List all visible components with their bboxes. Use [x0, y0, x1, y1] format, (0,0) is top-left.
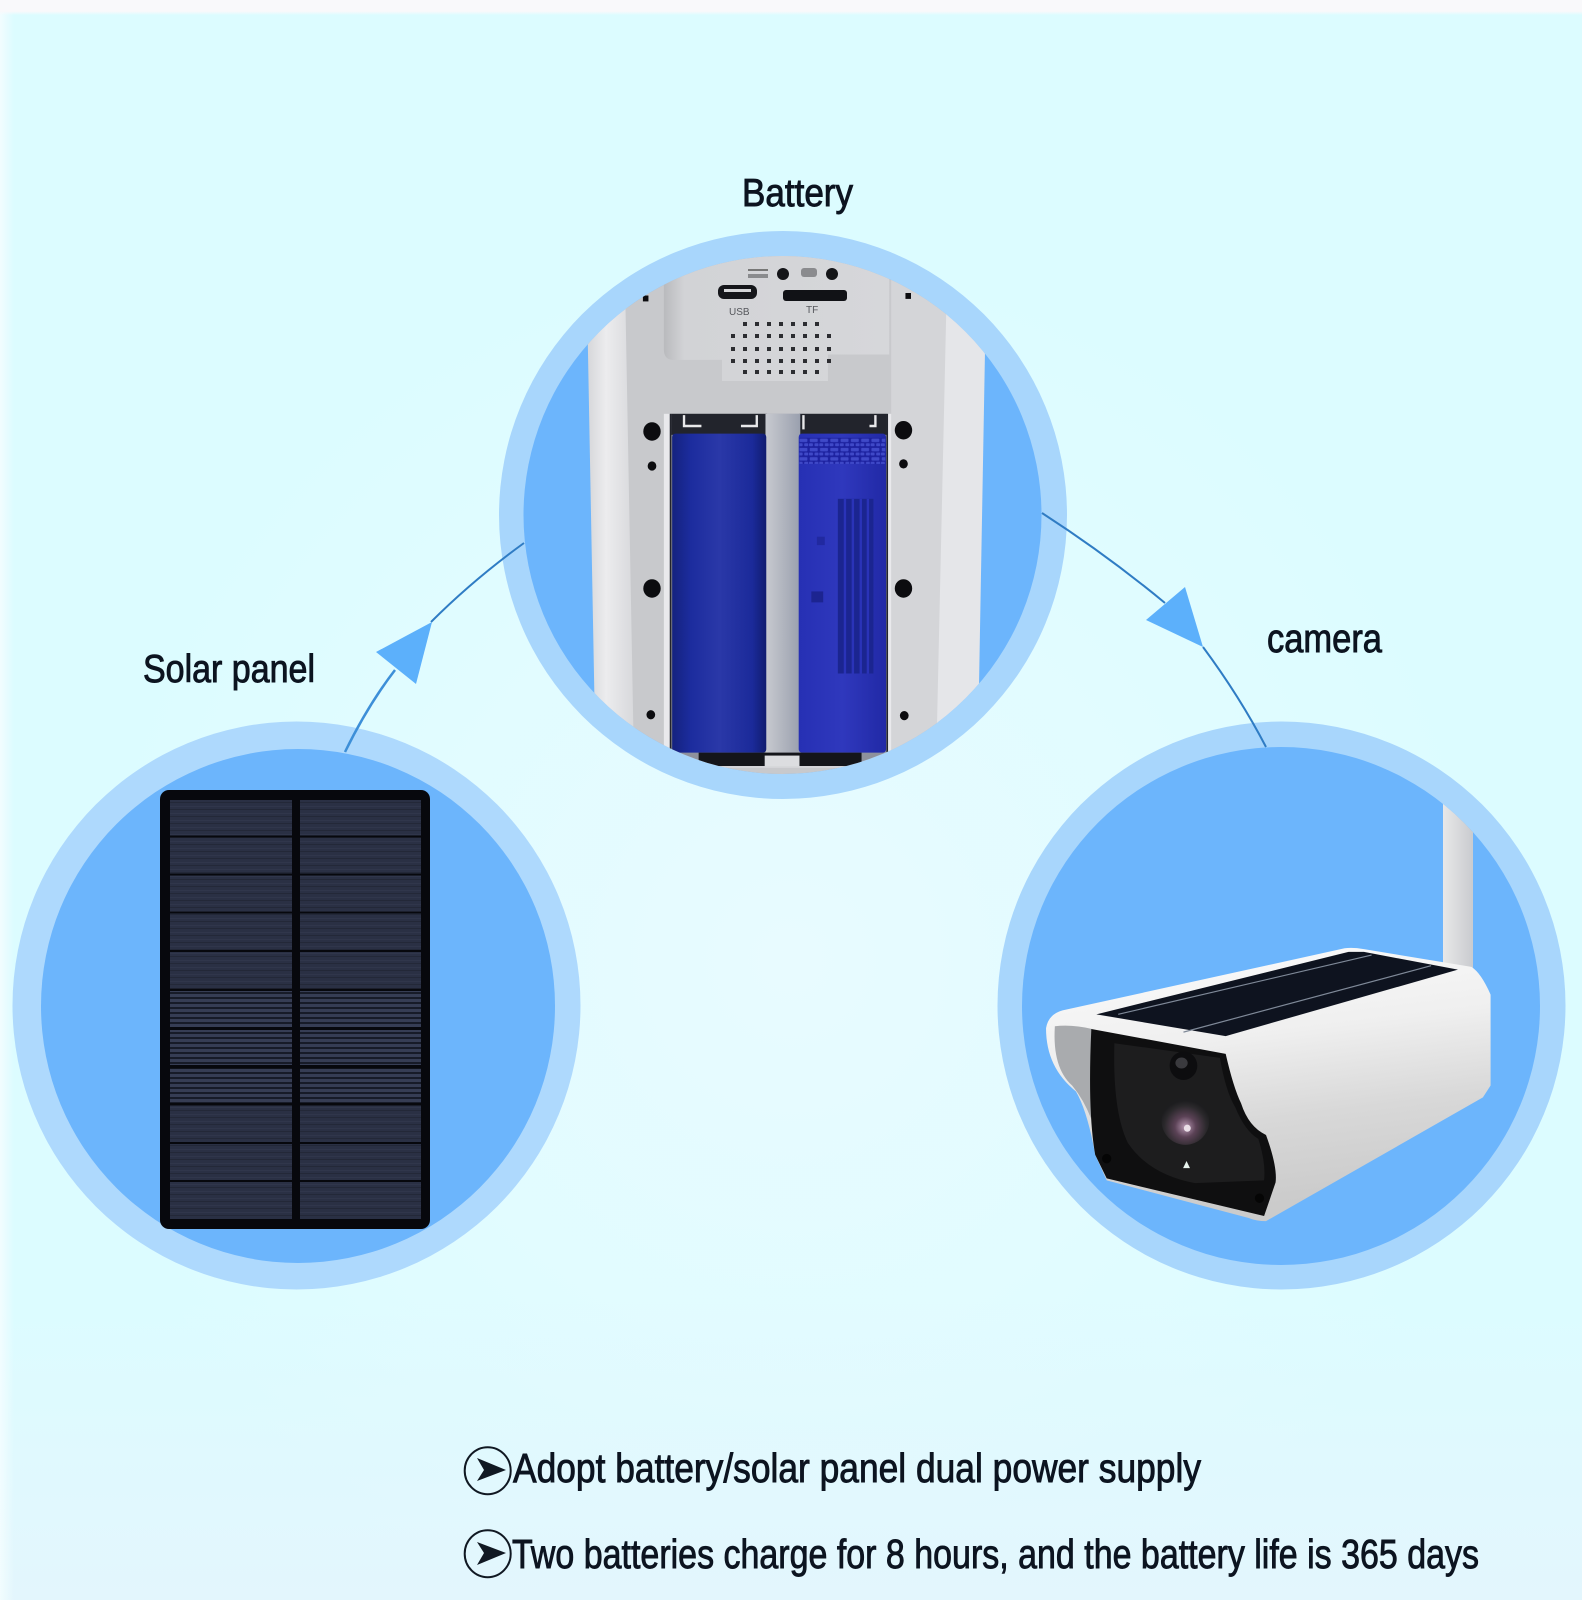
port panel: usb, tf slot, buttons and speaker	[718, 268, 847, 374]
icon: arrow in circle	[465, 1530, 511, 1577]
camera device	[1046, 948, 1491, 1221]
heading: Battery: Battery	[742, 172, 853, 215]
antenna	[1443, 804, 1473, 968]
heading: Solar panel: Solar panel	[143, 648, 315, 691]
panel: battery circle	[499, 231, 1067, 799]
battery compartment photo	[586, 244, 987, 775]
ir sensor	[1170, 1052, 1197, 1080]
led	[1183, 1161, 1190, 1168]
main lens	[1162, 1097, 1209, 1145]
port panel: usb, tf slot, buttons and speaker: TF	[806, 305, 818, 316]
hood interior	[1055, 1026, 1092, 1119]
panel: solar panel circle	[12, 722, 580, 1290]
bullet: battery life	[465, 1530, 1479, 1577]
arrow: battery to camera	[1042, 513, 1266, 747]
screws	[643, 293, 912, 720]
port panel: usb, tf slot, buttons and speaker: USB	[729, 307, 750, 318]
icon: arrow in circle	[465, 1447, 511, 1494]
heading: camera: camera	[1267, 617, 1383, 661]
front face	[1090, 1029, 1276, 1216]
solar top	[1096, 952, 1458, 1036]
arrow: solar panel to battery	[345, 543, 524, 752]
solar panel	[160, 790, 430, 1229]
text: bullet one: Adopt battery/solar panel dual power supply	[513, 1445, 1201, 1491]
battery contacts	[684, 415, 875, 429]
panel: camera circle	[998, 722, 1566, 1290]
bullet: dual power supply	[465, 1445, 1201, 1494]
